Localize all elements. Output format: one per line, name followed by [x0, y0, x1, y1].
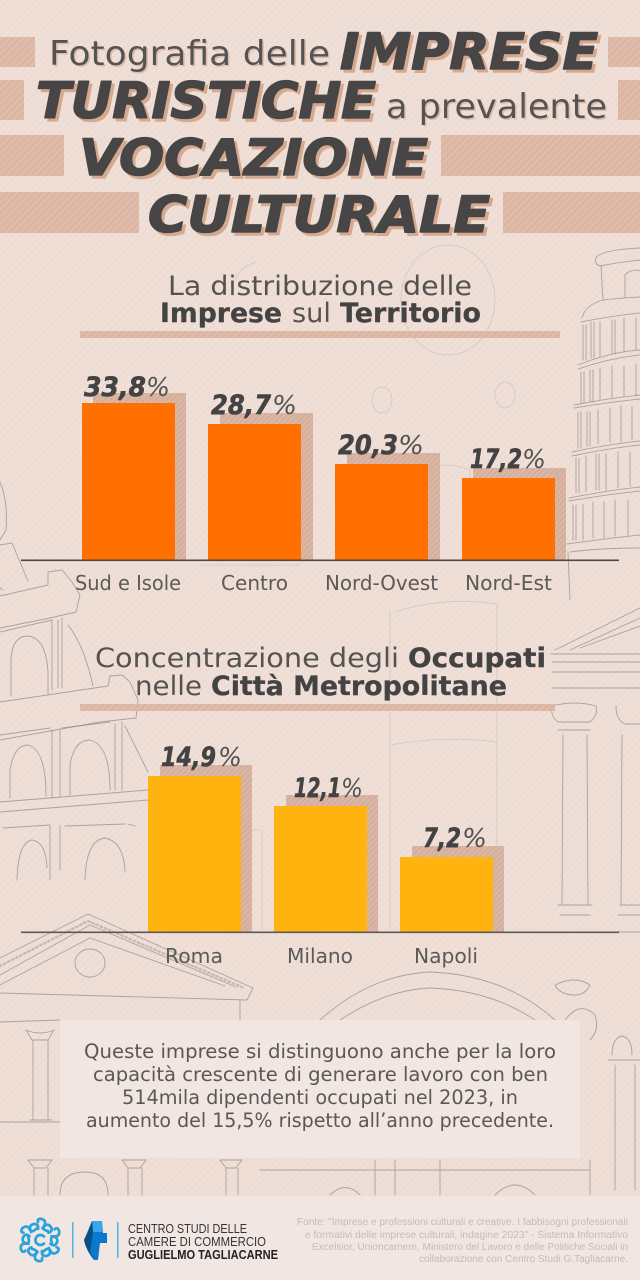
bar: Nord-Est 17,2%: [462, 444, 566, 595]
bar: Roma 14,9%: 14,9: [161, 742, 216, 773]
bar: Centro 28,7%: [208, 390, 313, 595]
title: TURISTICHE: [36, 72, 376, 130]
callout: testo occupazione: Queste imprese si distinguono anche per la loro: [84, 1040, 556, 1063]
bar: Roma 14,9%: Roma: [165, 944, 223, 968]
bar: Nord-Ovest 20,3%: Nord-Ovest: [325, 571, 438, 595]
title: CULTURALE: [148, 186, 490, 244]
logo text: [128, 1222, 278, 1262]
heading: distribuzione imprese: Imprese: [160, 298, 282, 329]
bar: Milano 12,1%: 12,1: [294, 773, 341, 804]
bar: Centro 28,7%: %: [272, 391, 297, 421]
sketch: pediment and lower building: [0, 914, 640, 1195]
icon: logo camere di commercio: [17, 1219, 63, 1261]
bar: Centro 28,7%: 28,7: [211, 390, 271, 421]
logo text: CAMERE DI COMMERCIO: [128, 1235, 266, 1249]
divider: [117, 1222, 118, 1258]
heading: concentrazione occupati: Città Metropolitane: [211, 671, 507, 702]
bar: Sud e Isole 33,8%: [75, 372, 186, 595]
bar: Sud e Isole 33,8%: Sud e Isole: [75, 571, 181, 595]
bar chart: occupati nelle città metropolitane: [21, 742, 619, 968]
bar: Sud e Isole 33,8%: %: [146, 373, 170, 403]
heading: distribuzione imprese: Territorio: [340, 298, 481, 329]
bar: Nord-Ovest 20,3%: %: [398, 431, 424, 461]
logo text: CENTRO STUDI DELLE: [128, 1222, 247, 1236]
footer: [0, 1196, 640, 1280]
divider: [72, 1222, 74, 1258]
bar: Milano 12,1%: [274, 773, 378, 968]
bar: Nord-Ovest 20,3%: 20,3: [338, 430, 398, 461]
bar: Nord-Est 17,2%: %: [522, 445, 546, 475]
sketch: faint central tower and ring: [200, 245, 515, 930]
source note: Excelsior, Unioncamere, Ministero del Lavoro e delle Politiche Sociali in: [312, 1242, 628, 1253]
bar: Nord-Ovest 20,3%: [325, 430, 440, 595]
title: IMPRESE: [340, 23, 598, 81]
background: architectural sketches: [0, 245, 640, 1195]
logo text: GUGLIELMO TAGLIACARNE: [128, 1248, 278, 1262]
heading: distribuzione imprese: sul: [292, 298, 331, 329]
bar: Napoli 7,2%: %: [462, 824, 487, 854]
heading: distribuzione imprese: [80, 271, 560, 338]
title decorative bands: [0, 37, 640, 233]
title: a prevalente: [386, 87, 607, 127]
callout: testo occupazione: [60, 1020, 580, 1158]
callout: testo occupazione: aumento del 15,5% rispetto all’anno precedente.: [86, 1109, 554, 1132]
title: VOCAZIONE: [79, 129, 428, 187]
callout: testo occupazione: 514mila dipendenti occupati nel 2023, in: [122, 1086, 518, 1109]
heading: concentrazione occupati: Concentrazione degli: [95, 643, 399, 674]
bar: Napoli 7,2%: 7,2: [423, 823, 461, 854]
source note: collaborazione con Centro Studi G.Tagliacarne.: [419, 1254, 628, 1265]
title: Fotografia delle: [49, 34, 330, 74]
bar: Roma 14,9%: %: [218, 743, 242, 773]
bar: Centro 28,7%: Centro: [221, 571, 288, 595]
heading: concentrazione occupati: Occupati: [408, 643, 546, 674]
bar: Nord-Est 17,2%: Nord-Est: [465, 571, 552, 595]
source note: e formativi delle imprese culturali, indagine 2023" - Sistema Informativo: [305, 1230, 628, 1241]
bar: Milano 12,1%: %: [341, 774, 363, 804]
sketch: colosseum: [0, 482, 148, 880]
heading: distribuzione imprese: La distribuzione delle: [168, 271, 472, 302]
bar: Nord-Est 17,2%: 17,2: [470, 444, 522, 475]
bar: Roma 14,9%: [148, 742, 252, 968]
title: [36, 23, 607, 244]
source note: Fonte: "Imprese e professioni culturali e creative. I fabbisogni professionali: [297, 1217, 628, 1228]
heading: concentrazione occupati: [80, 643, 555, 711]
bar chart: imprese sul territorio: [21, 372, 619, 595]
heading: concentrazione occupati: nelle: [135, 671, 202, 702]
sketch: pantheon portico: [551, 608, 640, 932]
bar: Napoli 7,2%: Napoli: [414, 944, 478, 968]
callout: testo occupazione: capacità crescente di generare lavoro con ben: [93, 1063, 548, 1086]
bar: Napoli 7,2%: [400, 823, 504, 968]
bar: Milano 12,1%: Milano: [287, 944, 353, 968]
sketch: tower of Pisa: [567, 248, 640, 600]
icon: logo tagliacarne: [84, 1221, 107, 1260]
bar: Sud e Isole 33,8%: 33,8: [84, 372, 146, 403]
source note: [297, 1217, 628, 1265]
